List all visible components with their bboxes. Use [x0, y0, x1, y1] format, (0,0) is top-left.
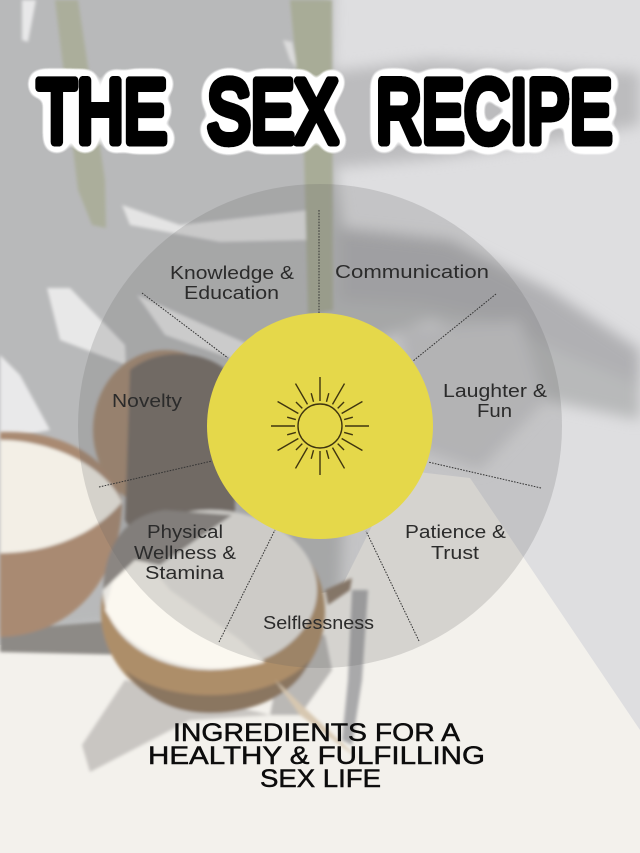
yellow centre circle [207, 313, 433, 539]
white highlights [22, 0, 36, 42]
label: selflessness: Selflessness [263, 612, 374, 633]
title [37, 61, 612, 161]
title: THE [37, 61, 167, 161]
label: physical wellness and stamina: Wellness & [134, 542, 237, 563]
label: knowledge and education: Education [184, 282, 279, 303]
subtitle: SEX LIFE [260, 765, 381, 793]
wheel labels [112, 261, 548, 633]
label: communication: Communication [335, 261, 489, 282]
stalks [55, 0, 106, 228]
panel: translucent wheel circle [78, 184, 562, 668]
label: patience and trust: Trust [431, 542, 479, 563]
subtitle: INGREDIENTS FOR A [173, 719, 460, 747]
cream table surface [0, 470, 640, 853]
label: patience and trust [405, 521, 507, 563]
label: laughter and fun [443, 380, 548, 421]
label: laughter and fun: Fun [477, 400, 512, 421]
subtitle [148, 719, 485, 793]
left half coconut [0, 432, 122, 637]
icon: sun [271, 377, 369, 475]
cast shadows [82, 680, 270, 772]
label: novelty: Novelty [112, 390, 183, 411]
back coconut [93, 350, 237, 510]
label: patience and trust: Patience & [405, 521, 507, 542]
label: physical wellness and stamina: Stamina [145, 562, 225, 583]
label: knowledge and education: Knowledge & [170, 262, 295, 283]
subtitle: HEALTHY & FULFILLING [148, 742, 485, 770]
label: laughter and fun: Laughter & [443, 380, 548, 401]
front half coconut [101, 511, 325, 713]
label: physical wellness and stamina: Physical [147, 521, 223, 542]
label: knowledge and education [170, 262, 295, 303]
dotted spokes [99, 210, 541, 642]
label: physical wellness and stamina [134, 521, 237, 583]
title: SEX [207, 61, 338, 161]
